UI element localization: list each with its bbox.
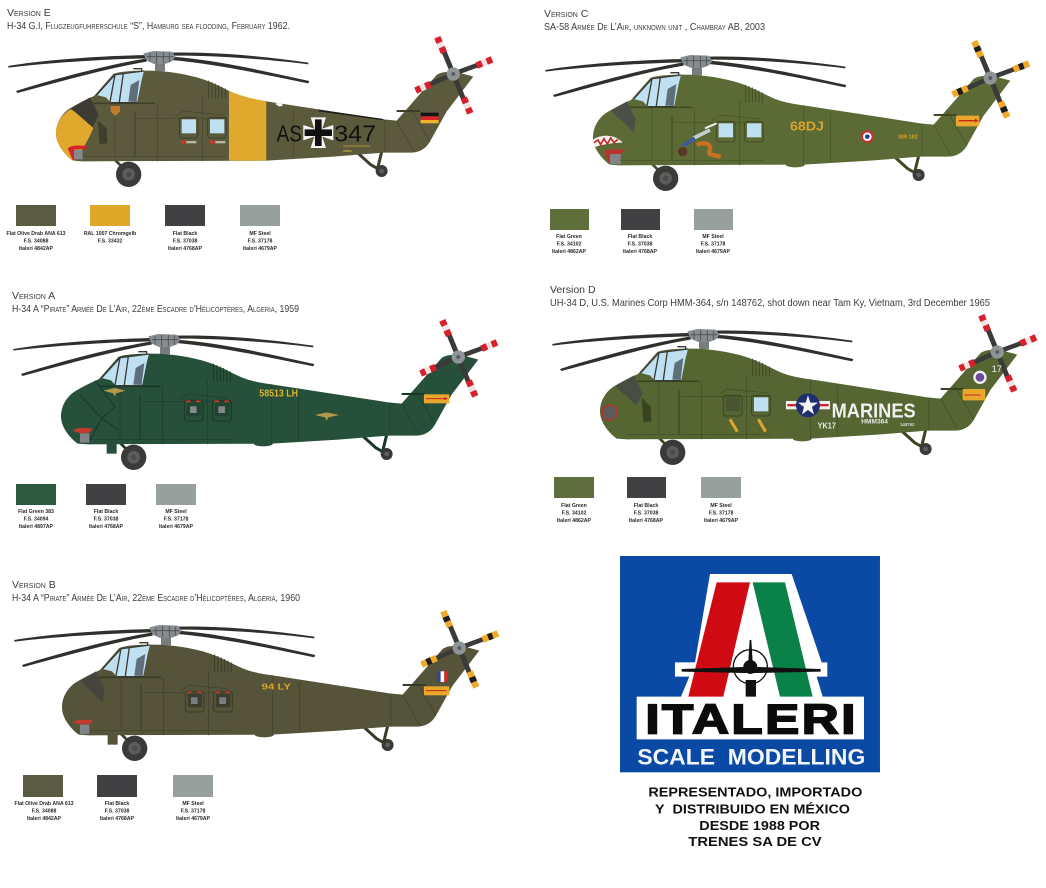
- heading: Version D: Version D: [550, 284, 596, 296]
- heading: Version B: [12, 579, 300, 604]
- colour swatches: Version C: [550, 209, 733, 255]
- heading: Version A: H-34 A “Pirate” Armée De L’Air, 22ème Escadre d’Hélicoptères, Algeria, 1959: [12, 303, 299, 315]
- helicopter: Version E: [8, 37, 492, 187]
- markings: Version D: HMM364: [861, 420, 889, 426]
- colour swatches: Version B: Flat Black: [105, 801, 129, 807]
- colour swatches: Version E: Italeri 4842AP: [19, 246, 54, 252]
- colour swatches: Version A: F.S. 34094: [24, 516, 49, 522]
- colour swatches: Version B: F.S. 37038: [105, 808, 130, 814]
- markings: Version B: 94 LY: [262, 681, 291, 691]
- icon: white A outline: [637, 574, 864, 739]
- heading: Version B: Version B: [12, 579, 56, 591]
- colour swatches: Version A: F.S. 37178: [164, 516, 189, 522]
- colour swatches: Version E: Italeri 4679AP: [243, 246, 278, 252]
- colour swatches: Version B: MF Steel: [182, 801, 204, 807]
- heading: Version E: [7, 7, 290, 32]
- colour swatches: Version B: Flat Olive Drab ANA 613: [14, 801, 74, 807]
- colour swatches: Version B: F.S. 34088: [32, 808, 57, 814]
- text block: distributor note: Y DISTRIBUIDO EN MÉXICO: [655, 801, 850, 816]
- markings: Version D: 148762: [900, 422, 915, 427]
- colour swatches: Version D: F.S. 34102: [562, 510, 587, 516]
- colour swatches: Version C: Italeri 4768AP: [623, 249, 658, 255]
- colour swatches: Version C: F.S. 37178: [701, 242, 726, 248]
- colour swatches: Version B: [14, 775, 213, 822]
- markings: Version A: 58513 LH: [259, 389, 298, 400]
- heading: Version A: Version A: [12, 290, 55, 302]
- colour swatches: Version A: Italeri 4897AP: [19, 524, 54, 530]
- panel: Version A: [12, 290, 497, 530]
- wordmark: ITALERI: ITALERI: [645, 697, 858, 743]
- colour swatches: Version A: Flat Green 383: [18, 509, 54, 515]
- colour swatches: Version B: Italeri 4679AP: [176, 816, 211, 822]
- heading: Version C: Version C: [544, 8, 589, 20]
- icon: red stripe: [688, 582, 750, 697]
- colour swatches: Version A: MF Steel: [165, 509, 187, 515]
- colour swatches: Version C: Flat Black: [628, 234, 652, 240]
- colour swatches: Version E: F.S. 34088: [24, 238, 49, 244]
- colour swatches: Version D: MF Steel: [710, 503, 732, 509]
- colour swatches: Version E: Flat Olive Drab ANA 613: [6, 231, 66, 237]
- colour swatches: Version E: F.S. 37038: [173, 238, 198, 244]
- colour swatches: Version E: Flat Black: [173, 231, 197, 237]
- helicopter: Version E: 347: [334, 121, 376, 147]
- heading: Version D: UH-34 D, U.S. Marines Corp HMM-364, s/n 148762, shot down near Tam Ky, Vietnam, 3rd December 1965: [550, 297, 990, 309]
- colour swatches: Version E: MF Steel: [249, 231, 271, 237]
- helicopter: Version E: AS: [277, 121, 302, 147]
- markings: Version A: [73, 388, 449, 443]
- colour swatches: Version E: [6, 205, 280, 252]
- helicopter: Version B: [14, 611, 498, 761]
- panel: Version C: [544, 8, 1029, 255]
- helicopter: Version D: [552, 315, 1036, 465]
- colour swatches: Version B: Italeri 4768AP: [100, 816, 135, 822]
- colour swatches: Version C: Flat Green: [556, 234, 582, 240]
- colour swatches: Version D: Flat Black: [634, 503, 658, 509]
- colour swatches: Version C: Italeri 4679AP: [696, 249, 731, 255]
- markings: Version D: [602, 364, 1002, 432]
- heading: Version A: [12, 290, 299, 315]
- tagline: SCALE MODELLING: SCALE MODELLING: [637, 745, 865, 770]
- markings: Version D: 17: [992, 364, 1002, 374]
- colour swatches: Version E: F.S. 37178: [248, 238, 273, 244]
- colour swatches: Version D: [554, 477, 741, 524]
- colour swatches: Version E: F.S. 33432: [98, 238, 123, 244]
- panel: Version B: [12, 579, 498, 822]
- colour swatches: Version D: Italeri 4679AP: [704, 518, 739, 524]
- colour swatches: Version E: RAL 1007 Chromgelb: [84, 231, 136, 237]
- colour swatches: Version D: Flat Green: [561, 503, 587, 509]
- yellow nose and band: [56, 91, 267, 161]
- panel: Version E: [6, 7, 492, 252]
- icon: plane and target ring: [682, 640, 821, 697]
- heading: Version C: [544, 8, 765, 33]
- colour swatches: Version C: F.S. 37038: [628, 242, 653, 248]
- heading: Version E: H-34 G.I, Flugzeugfuhrerschule “S”, Hamburg sea flooding, February 1962.: [7, 20, 290, 32]
- colour swatches: Version A: F.S. 37038: [94, 516, 119, 522]
- markings: Version B: [73, 671, 449, 734]
- colour swatches: Version E: Italeri 4768AP: [168, 246, 203, 252]
- markings: Version D: YK17: [818, 422, 836, 431]
- colour swatches: Version B: F.S. 37178: [181, 808, 206, 814]
- colour swatches: Version B: Italeri 4842AP: [27, 816, 62, 822]
- colour swatches: Version A: Italeri 4679AP: [159, 524, 194, 530]
- text block: distributor note: REPRESENTADO, IMPORTADO: [648, 785, 862, 800]
- colour swatches: Version A: Flat Black: [94, 509, 118, 515]
- colour swatches: Version C: F.S. 34102: [557, 242, 582, 248]
- colour swatches: Version A: Italeri 4768AP: [89, 524, 124, 530]
- nose art and markings: Version C: 68DJ: [790, 118, 824, 133]
- heading: Version B: H-34 A “Pirate” Armée De L’Air, 22ème Escadre d’Hélicoptères, Algeria, 1960: [12, 592, 300, 604]
- colour swatches: Version D: Italeri 4768AP: [629, 518, 664, 524]
- logo: Italeri Scale Modelling: [620, 556, 880, 772]
- colour swatches: Version C: Italeri 4862AP: [552, 249, 587, 255]
- heading: Version D: [550, 284, 990, 309]
- colour swatches: Version D: Italeri 4862AP: [557, 518, 592, 524]
- panel: Version D: [550, 284, 1036, 524]
- nose art and markings: Version C: SIR 182: [898, 134, 918, 140]
- helicopter: Version A: [13, 320, 497, 470]
- nose art and markings: Version C: [593, 116, 979, 164]
- icon: green stripe: [753, 582, 813, 697]
- colour swatches: Version D: F.S. 37178: [709, 510, 734, 516]
- markings: Version D: MARINES: [832, 400, 916, 422]
- heading: Version C: SA-58 Armée De L’Air, unknown unit , Chambray AB, 2003: [544, 21, 765, 33]
- heading: Version E: Version E: [7, 7, 51, 19]
- helicopter: Version C: [545, 41, 1029, 191]
- colour swatches: Version A: [16, 484, 196, 530]
- text block: distributor note: DESDE 1988 POR: [699, 818, 820, 833]
- colour swatches: Version D: F.S. 37038: [634, 510, 659, 516]
- text block: distributor note: TRENES SA DE CV: [688, 834, 822, 849]
- text block: distributor note: [648, 785, 862, 849]
- colour swatches: Version C: MF Steel: [702, 234, 724, 240]
